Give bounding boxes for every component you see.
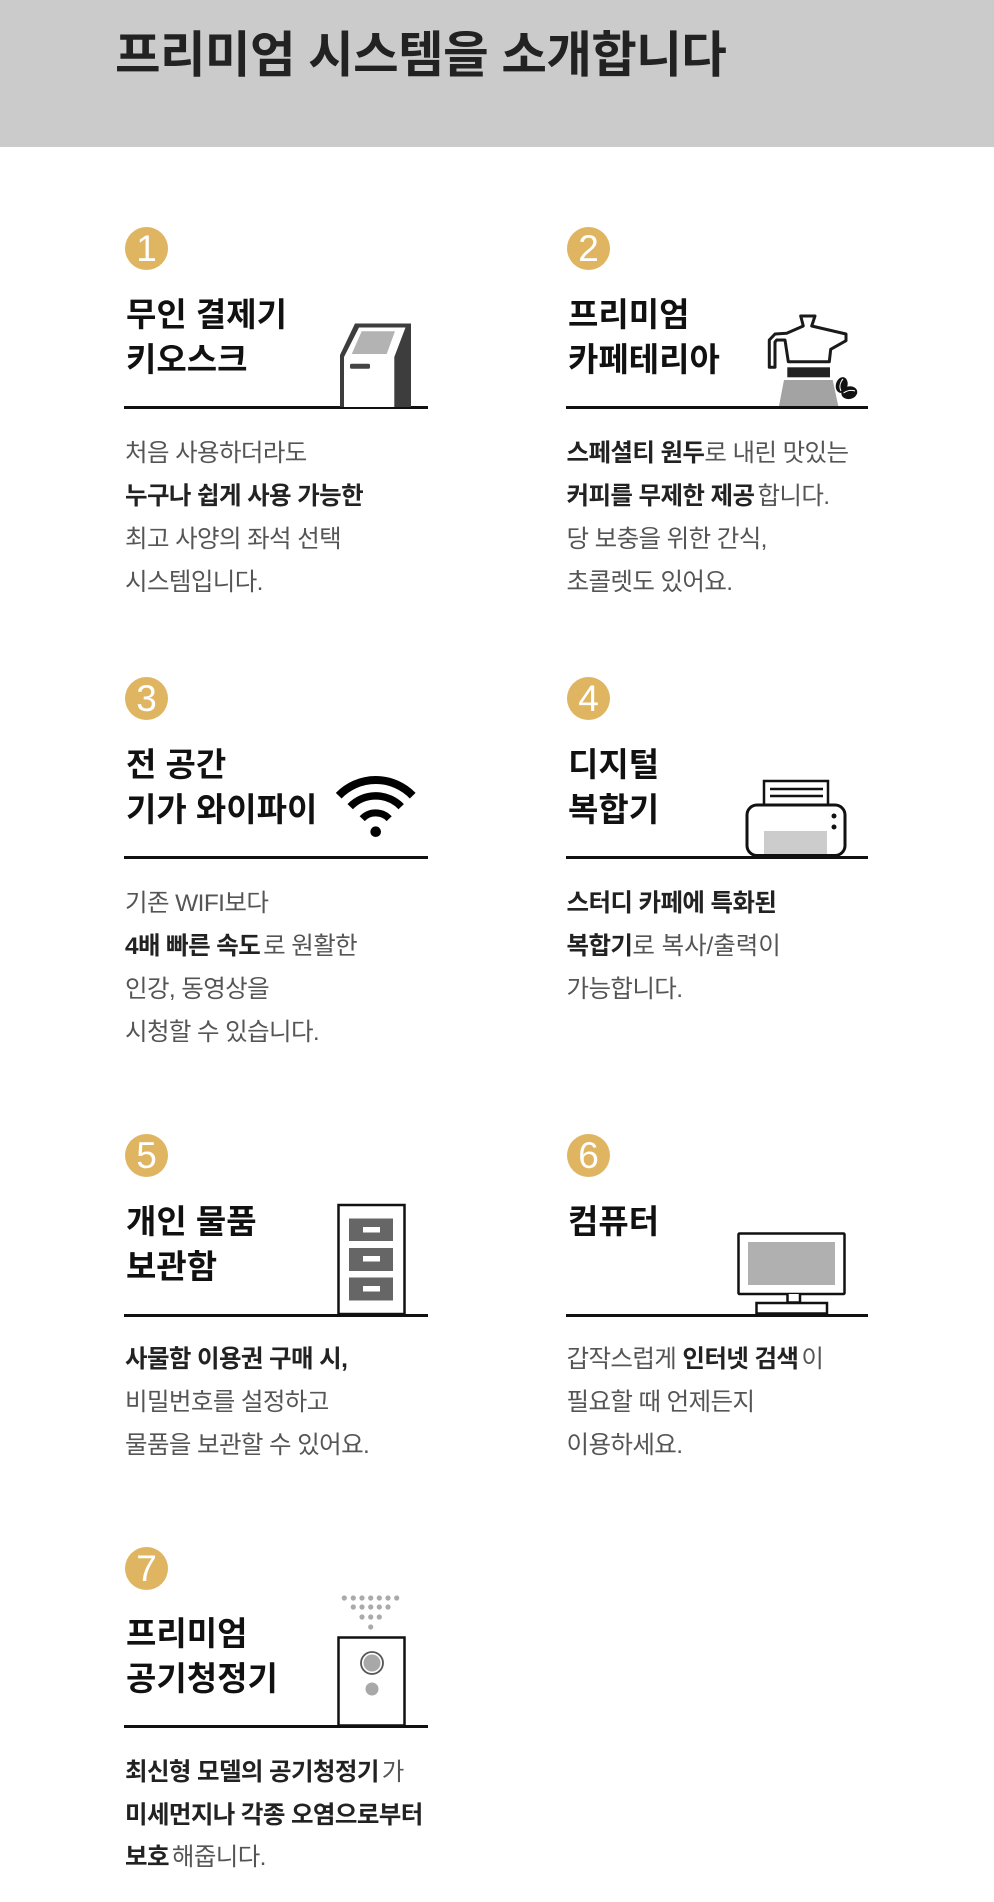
- body text 3: 인강, 동영상을: [125, 976, 269, 1003]
- icon: kiosk: [340, 324, 411, 407]
- rule: [124, 1725, 428, 1728]
- heading 4: 디지털: [568, 746, 659, 783]
- body text 5: 비밀번호를 설정하고: [125, 1389, 329, 1416]
- number badge 3: [125, 677, 168, 720]
- heading 3: 전 공간: [126, 746, 226, 783]
- rule: [566, 406, 868, 409]
- rule: [566, 1314, 868, 1317]
- body text 4: 스터디 카페에 특화된: [566, 890, 776, 917]
- body text 7: 미세먼지나 각종 오염으로부터: [125, 1802, 423, 1829]
- body text 3: [125, 890, 357, 1046]
- body text 1: [125, 440, 363, 596]
- panel: 3 wifi: [124, 677, 428, 1046]
- heading 4: 복합기: [568, 791, 659, 828]
- body text 2: 초콜렛도 있어요.: [566, 569, 732, 596]
- number badge 6: [567, 1134, 610, 1177]
- body text 6: 이용하세요.: [566, 1432, 682, 1459]
- body text 6: [566, 1346, 823, 1459]
- number badge 1: [125, 227, 168, 270]
- heading 1: 키오스크: [126, 341, 247, 378]
- body text 5: 물품을 보관할 수 있어요.: [125, 1432, 369, 1459]
- number badge 6: 6: [578, 1135, 599, 1176]
- heading 3: 기가 와이파이: [126, 791, 317, 828]
- heading 7: 공기청정기: [126, 1660, 278, 1697]
- body text 3: 4배 빠른 속도로 원활한: [125, 933, 357, 960]
- icon: moka pot with coffee beans: [768, 314, 858, 406]
- body text 7: 보호해줍니다.: [125, 1844, 266, 1871]
- rule: [124, 406, 428, 409]
- number badge 1: 1: [136, 228, 157, 269]
- number badge 2: 2: [578, 228, 599, 269]
- heading 2: [568, 296, 720, 378]
- body text 4: 가능합니다.: [566, 976, 682, 1003]
- icon: wifi: [336, 776, 416, 837]
- number badge 4: [567, 677, 610, 720]
- panel: 1 kiosk: [124, 227, 428, 596]
- heading 5: [126, 1203, 257, 1285]
- title: 프리미엄 시스템을 소개합니다: [115, 28, 726, 83]
- body text 1: 처음 사용하더라도: [125, 440, 307, 467]
- icon: printer: [746, 780, 846, 856]
- body text 6: 갑작스럽게 인터넷 검색이: [566, 1346, 823, 1373]
- heading 1: [126, 296, 287, 378]
- body text 1: 시스템입니다.: [125, 569, 263, 596]
- number badge 2: [567, 227, 610, 270]
- icon: air purifier with dots: [337, 1595, 406, 1725]
- panel: 2 cafeteria: [566, 227, 868, 596]
- body text 4: [566, 890, 781, 1003]
- rule: [124, 1314, 428, 1317]
- number badge 3: 3: [136, 678, 157, 719]
- heading 7: [126, 1615, 278, 1697]
- number badge 7: [125, 1547, 168, 1590]
- body text 1: 최고 사양의 좌석 선택: [125, 526, 341, 553]
- body text 5: [125, 1346, 369, 1459]
- rule: [124, 856, 428, 859]
- body text 3: 기존 WIFI보다: [125, 890, 268, 917]
- body text 1: 누구나 쉽게 사용 가능한: [125, 483, 363, 510]
- body text 2: 당 보충을 위한 간식,: [566, 526, 767, 553]
- heading 5: 보관함: [126, 1248, 217, 1285]
- number badge 5: [125, 1134, 168, 1177]
- heading 4: [568, 746, 659, 828]
- number badge 5: 5: [136, 1135, 157, 1176]
- body text 5: 사물함 이용권 구매 시,: [125, 1346, 347, 1373]
- body text 2: 스페셜티 원두로 내린 맛있는: [566, 440, 848, 467]
- body text 2: 커피를 무제한 제공합니다.: [566, 483, 829, 510]
- panel: 7 air purifier: [124, 1547, 428, 1871]
- body text 7: 최신형 모델의 공기청정기가: [125, 1759, 404, 1786]
- panel: 5 locker: [124, 1134, 428, 1459]
- body text 7: [125, 1759, 423, 1871]
- header band: [0, 0, 994, 147]
- panel: 4 printer: [566, 677, 868, 1003]
- heading 1: 무인 결제기: [126, 296, 287, 333]
- rule: [566, 856, 868, 859]
- heading 3: [126, 746, 317, 828]
- body text 2: [566, 440, 848, 596]
- heading 6: 컴퓨터: [568, 1203, 659, 1240]
- body text 4: 복합기로 복사/출력이: [566, 933, 781, 960]
- number badge 4: 4: [578, 678, 599, 719]
- heading 7: 프리미엄: [126, 1615, 247, 1652]
- heading 2: 카페테리아: [568, 341, 720, 378]
- heading 5: 개인 물품: [126, 1203, 257, 1240]
- heading 2: 프리미엄: [568, 296, 689, 333]
- number badge 7: 7: [136, 1548, 157, 1589]
- icon: filing cabinet: [337, 1204, 406, 1314]
- body text 6: 필요할 때 언제든지: [566, 1389, 754, 1416]
- icon: monitor: [737, 1232, 846, 1314]
- body text 3: 시청할 수 있습니다.: [125, 1019, 319, 1046]
- panel: 6 computer: [566, 1134, 868, 1459]
